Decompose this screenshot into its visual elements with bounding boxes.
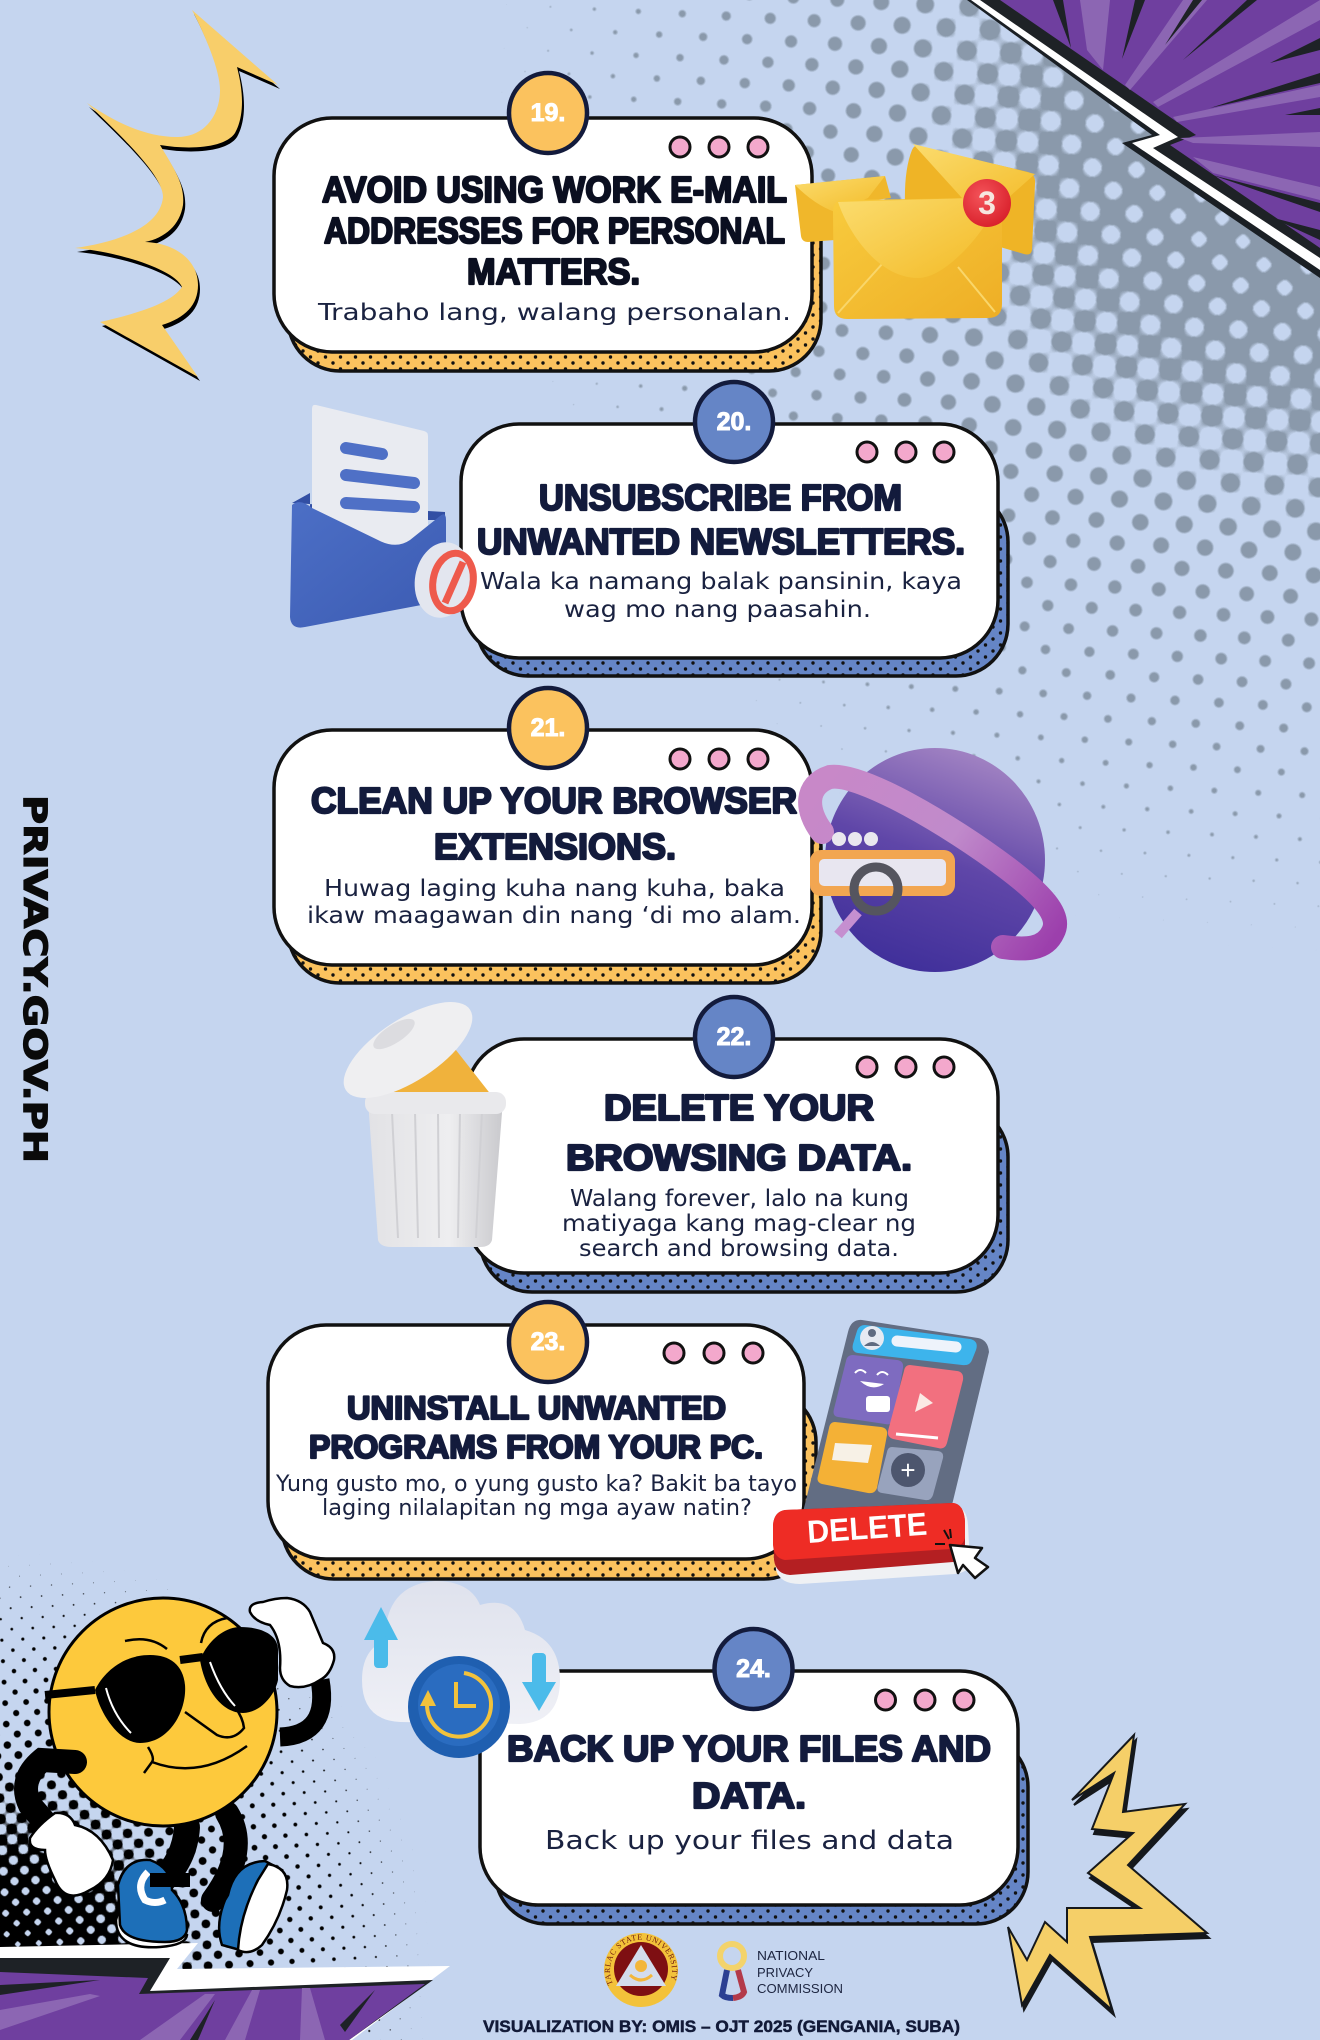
panel: tip 22 xyxy=(466,997,1008,1292)
comic burst: bottom left xyxy=(0,1943,450,2040)
icon: phone with delete button: + xyxy=(900,1455,916,1485)
icon: planet with search bar xyxy=(810,748,1055,972)
credit line: VISUALIZATION BY: OMIS – OJT 2025 (GENGANIA, SUBA) xyxy=(483,2017,960,2036)
body text: Yung gusto mo, o yung gusto ka? Bakit ba tayo xyxy=(275,1472,797,1497)
left shoe xyxy=(116,1860,190,1947)
body text: Huwag laging kuha nang kuha, baka xyxy=(324,876,785,902)
body text xyxy=(562,1186,916,1262)
heading: MATTERS. xyxy=(467,251,640,292)
logo: National Privacy Commission xyxy=(720,1944,843,1998)
panel: tip 24 xyxy=(480,1629,1028,1924)
heading xyxy=(507,1728,991,1816)
number badge 20 xyxy=(695,382,773,462)
heading xyxy=(322,169,787,292)
heading: UNINSTALL UNWANTED xyxy=(347,1390,726,1426)
heading xyxy=(566,1087,912,1178)
heading: DELETE YOUR xyxy=(604,1087,874,1128)
number badge 23: 23. xyxy=(531,1328,565,1356)
nose xyxy=(185,1707,244,1737)
clock xyxy=(408,1656,510,1758)
number badge 20: 20. xyxy=(717,408,751,436)
decoration: yellow lightning bottom right xyxy=(1008,1735,1209,2015)
body text: laging nilalapitan ng mga ayaw natin? xyxy=(322,1496,752,1521)
right arm xyxy=(280,1680,322,1737)
icon: trash can xyxy=(329,984,506,1247)
cursor xyxy=(935,1529,988,1578)
body text xyxy=(275,1472,797,1521)
eyebrows xyxy=(125,1618,227,1649)
window dots xyxy=(670,137,768,157)
logo: National Privacy Commission: NATIONAL xyxy=(757,1948,825,1963)
number badge 19: 19. xyxy=(531,99,565,127)
icon: cloud backup clock xyxy=(362,1581,560,1758)
body text: matiyaga kang mag-clear ng xyxy=(562,1211,916,1237)
heading: PROGRAMS FROM YOUR PC. xyxy=(309,1429,763,1465)
heading xyxy=(309,1390,763,1465)
body text: Back up your files and data xyxy=(545,1826,954,1856)
face xyxy=(49,1598,277,1826)
body text: search and browsing data. xyxy=(579,1236,899,1262)
mouth xyxy=(144,1746,247,1773)
icon: blue envelope with blocked letter xyxy=(290,405,478,628)
left envelope xyxy=(795,176,891,242)
panel: tip 19 xyxy=(274,73,821,371)
heading xyxy=(311,780,797,867)
number badge 21: 21. xyxy=(531,714,565,742)
halftone: bottom left black dots xyxy=(0,1520,470,2040)
heading: CLEAN UP YOUR BROWSER xyxy=(311,780,797,821)
number badge 23 xyxy=(509,1302,587,1382)
delete button xyxy=(773,1503,988,1584)
legs xyxy=(160,1813,236,1900)
notification badge: 3 xyxy=(978,185,996,221)
notification badge xyxy=(963,179,1011,227)
icon: phone with delete button xyxy=(773,1320,989,1584)
panel: tip 21 xyxy=(274,688,821,983)
heading: ADDRESSES FOR PERSONAL xyxy=(324,210,785,251)
heading: AVOID USING WORK E-MAIL xyxy=(322,169,787,210)
heading: EXTENSIONS. xyxy=(434,826,676,867)
delete button: DELETE xyxy=(806,1506,928,1550)
heading xyxy=(477,477,965,562)
search bar xyxy=(810,832,955,935)
up arrow xyxy=(364,1607,398,1668)
comic burst: top right xyxy=(967,0,1320,278)
side label: PRIVACY.GOV.PH xyxy=(16,795,54,1163)
character: sun with sunglasses xyxy=(26,1598,334,1952)
number badge 21 xyxy=(509,688,587,768)
window dots xyxy=(857,442,954,462)
window dots xyxy=(664,1343,763,1363)
blocked badge xyxy=(409,538,478,622)
number badge 22: 22. xyxy=(717,1023,751,1051)
back envelope xyxy=(905,144,1035,254)
front envelope xyxy=(833,198,1002,319)
left arm xyxy=(26,1760,75,1828)
heading: UNSUBSCRIBE FROM xyxy=(539,477,902,518)
body text xyxy=(307,876,801,929)
body text: Trabaho lang, walang personalan. xyxy=(317,300,791,326)
body text xyxy=(480,569,962,623)
heading: DATA. xyxy=(692,1775,806,1816)
body text: wag mo nang paasahin. xyxy=(564,597,871,623)
logo: National Privacy Commission: COMMISSION xyxy=(757,1981,843,1996)
number badge 24: 24. xyxy=(736,1655,771,1683)
window dots xyxy=(857,1057,954,1077)
sunglasses xyxy=(45,1627,278,1743)
body text: Wala ka namang balak pansinin, kaya xyxy=(480,569,962,595)
window dots xyxy=(876,1690,974,1710)
down arrow xyxy=(522,1653,556,1711)
left glove xyxy=(30,1813,113,1896)
window dots xyxy=(670,749,768,769)
halftone: top right grey dots xyxy=(380,0,1320,1000)
panel: tip 20 xyxy=(461,382,1008,676)
panel: tip 23 xyxy=(268,1302,816,1579)
logo: National Privacy Commission: PRIVACY xyxy=(757,1965,813,1980)
number badge 19 xyxy=(509,73,587,153)
decoration: yellow squiggle top left xyxy=(75,10,280,381)
right shoe xyxy=(219,1861,287,1952)
heading: UNWANTED NEWSLETTERS. xyxy=(477,521,965,562)
number badge 22 xyxy=(695,997,773,1077)
heading: BACK UP YOUR FILES AND xyxy=(507,1728,991,1769)
heading: BROWSING DATA. xyxy=(566,1137,912,1178)
logo: Tarlac State University seal: TARLAC STATE UNIVERSITY xyxy=(604,1934,678,1986)
body text: ikaw maagawan din nang ‘di mo alam. xyxy=(307,903,801,929)
raised glove xyxy=(250,1598,334,1687)
icon: yellow envelopes xyxy=(795,144,1035,319)
body text: Walang forever, lalo na kung xyxy=(570,1186,909,1212)
number badge 24 xyxy=(714,1629,792,1709)
